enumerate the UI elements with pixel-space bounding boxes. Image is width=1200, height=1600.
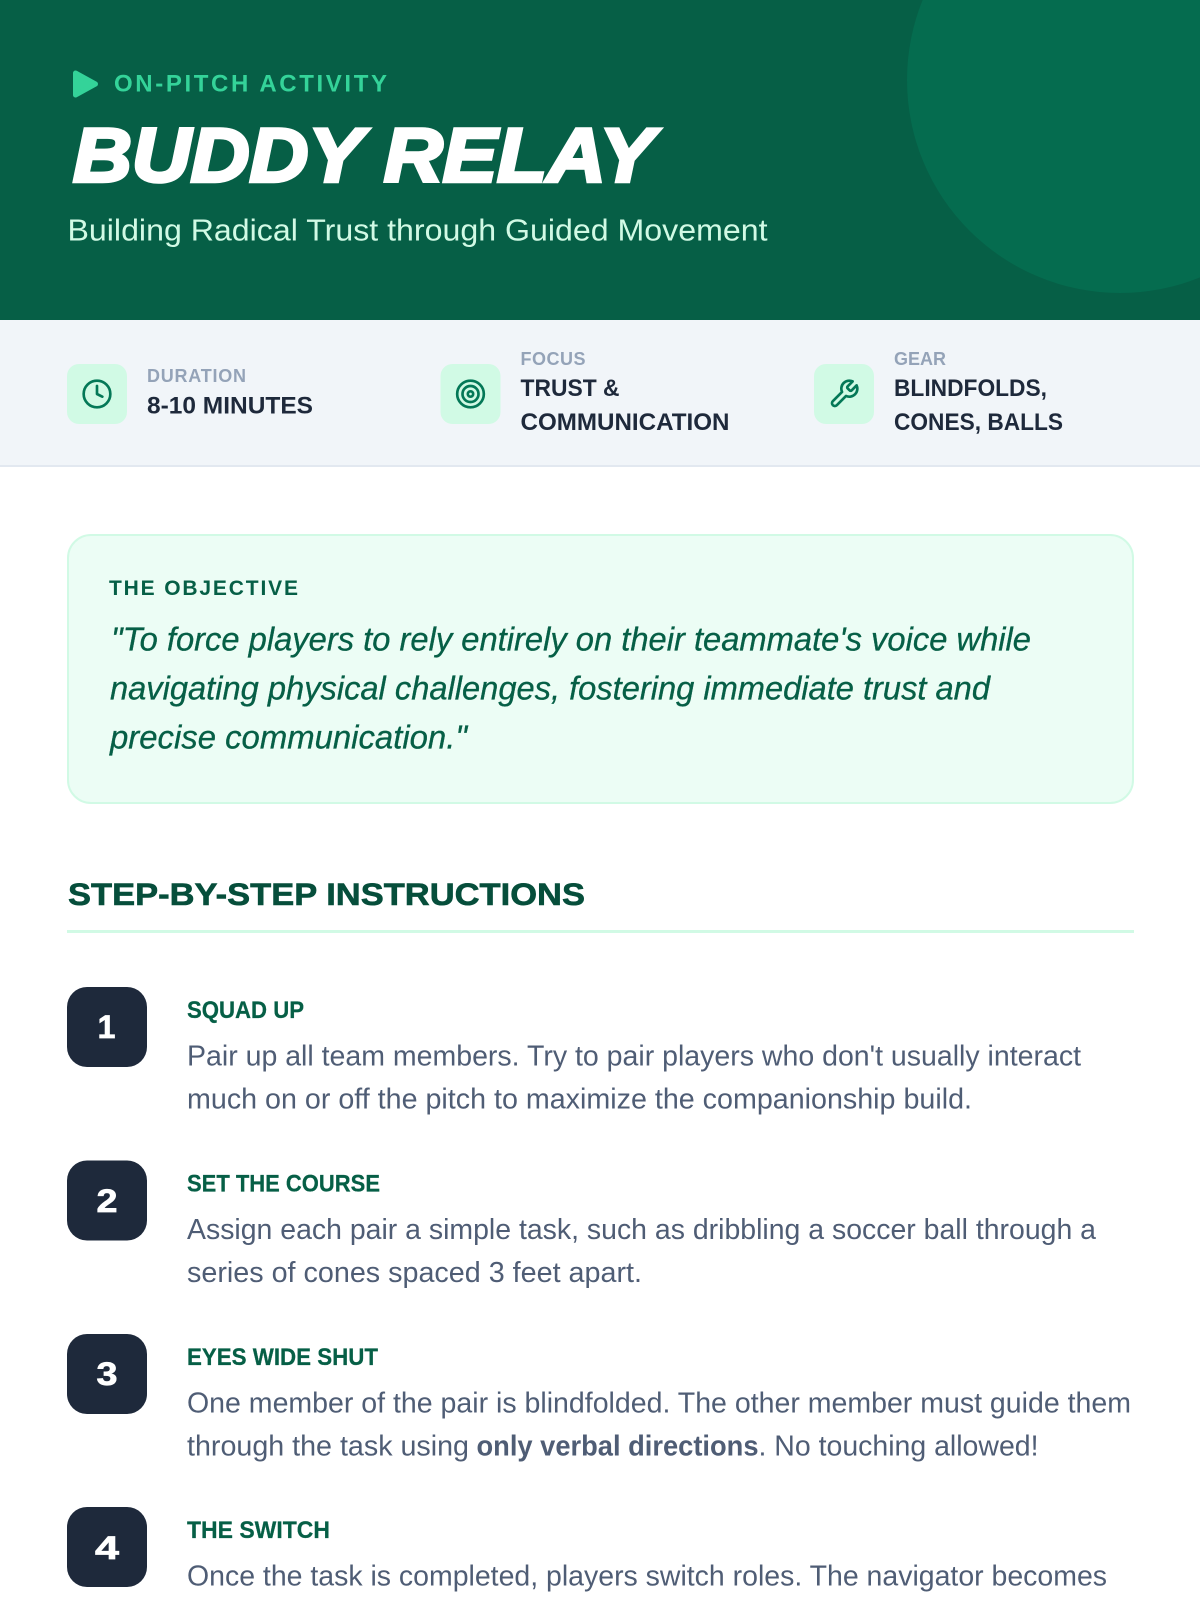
eyebrow label: ON-PITCH ACTIVITY xyxy=(114,70,387,98)
step text xyxy=(187,1214,1097,1289)
step text: Pair up all team members. Try to pair players who don't usually interact xyxy=(187,1040,1081,1072)
objective quote: precise communication." xyxy=(109,718,468,756)
step number 1: 1 xyxy=(98,1009,115,1045)
step text: Assign each pair a simple task, such as dribbling a soccer ball through a xyxy=(187,1214,1097,1246)
icon: wrench xyxy=(832,381,857,406)
meta bar xyxy=(0,320,1200,467)
section heading xyxy=(67,876,1134,933)
step text xyxy=(187,1040,1081,1116)
panel: objective xyxy=(68,535,1133,803)
gear label: GEAR xyxy=(894,349,946,369)
meta item: focus: COMMUNICATION xyxy=(520,409,730,436)
objective quote: "To force players to rely entirely on their teammate's voice while xyxy=(111,620,1031,658)
step title: eyes wide shut: EYES WIDE SHUT xyxy=(187,1344,378,1371)
step text: One member of the pair is blindfolded. The other member must guide them xyxy=(187,1388,1131,1420)
step title: squad up: SQUAD UP xyxy=(187,997,304,1024)
icon: play triangle xyxy=(76,73,96,95)
step number 3: 3 xyxy=(96,1356,118,1392)
focus value: TRUST & xyxy=(520,375,620,402)
step number 3 xyxy=(67,1334,147,1414)
step 4 xyxy=(67,1507,1107,1592)
step number 2: 2 xyxy=(96,1183,118,1219)
meta item: gear: CONES, BALLS xyxy=(894,409,1063,436)
meta item: gear xyxy=(814,349,1063,436)
step text: much on or off the pitch to maximize the companionship build. xyxy=(187,1084,972,1116)
header banner xyxy=(0,0,1200,320)
meta item: focus xyxy=(440,349,730,436)
step 2 xyxy=(67,1160,1097,1289)
icon: clock xyxy=(84,381,110,407)
step text: Once the task is completed, players switch roles. The navigator becomes xyxy=(187,1560,1107,1592)
step text: only verbal directions xyxy=(476,1430,758,1462)
section heading: STEP-BY-STEP INSTRUCTIONS xyxy=(68,876,585,912)
icon: target xyxy=(457,381,484,407)
objective heading: THE OBJECTIVE xyxy=(109,577,298,600)
step text xyxy=(187,1388,1131,1462)
step 1 xyxy=(67,987,1081,1116)
step number 2 xyxy=(67,1160,147,1240)
step 3 xyxy=(67,1334,1131,1462)
objective quote: navigating physical challenges, fostering immediate trust and xyxy=(110,670,992,706)
step title: set the course: SET THE COURSE xyxy=(187,1170,380,1198)
focus label: FOCUS xyxy=(520,349,586,369)
objective quote xyxy=(109,620,1031,756)
step text: series of cones spaced 3 feet apart. xyxy=(187,1257,642,1289)
title: BUDDY RELAY xyxy=(73,114,661,198)
step title: the switch: THE SWITCH xyxy=(187,1517,330,1544)
gear value: BLINDFOLDS, xyxy=(894,375,1047,402)
duration label: DURATION xyxy=(147,366,246,386)
step text: . No touching allowed! xyxy=(758,1430,1038,1462)
step text: through the task using xyxy=(187,1430,469,1462)
meta item: duration xyxy=(67,364,313,424)
step number 4 xyxy=(67,1507,147,1587)
subtitle: Building Radical Trust through Guided Movement xyxy=(68,212,768,248)
duration value: 8-10 MINUTES xyxy=(147,392,313,420)
step number 1 xyxy=(67,987,147,1067)
step number 4: 4 xyxy=(95,1530,119,1566)
